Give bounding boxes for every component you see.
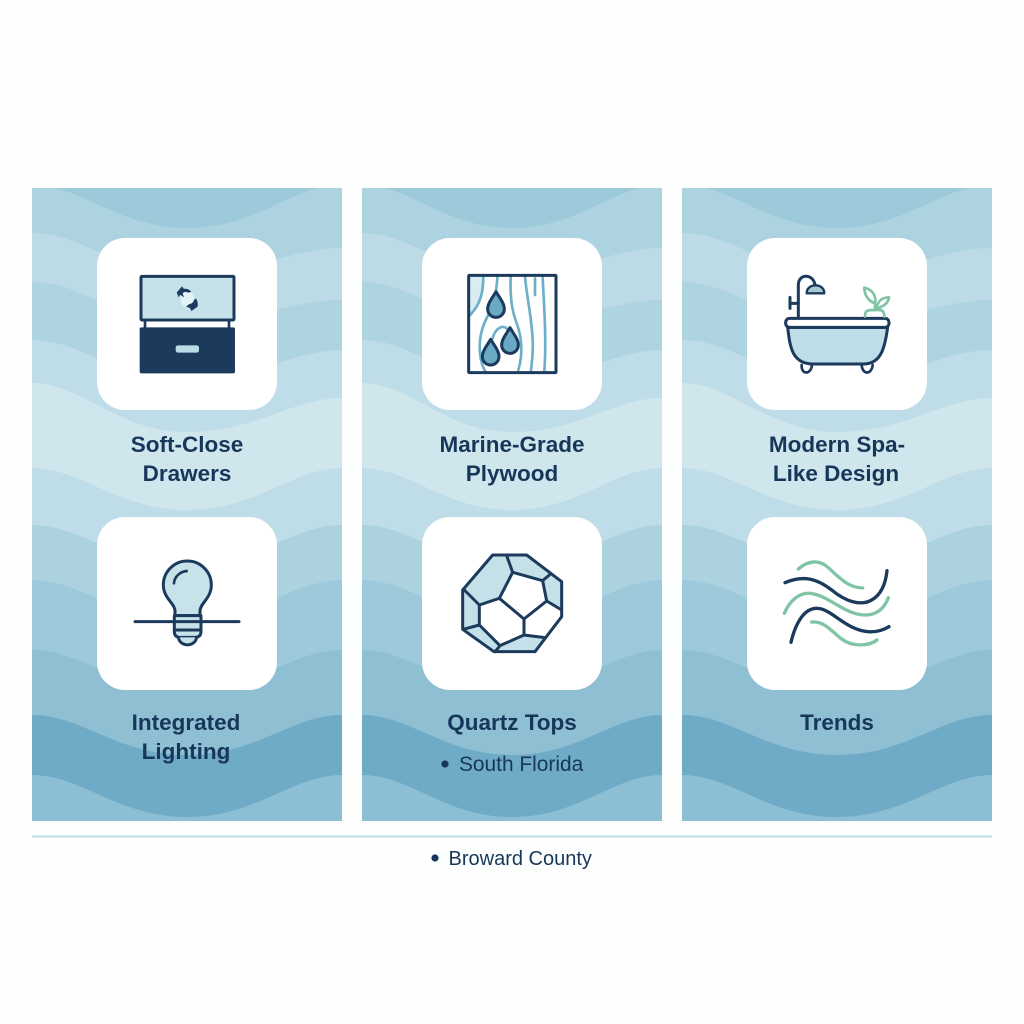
card: modern spa-like design <box>747 238 927 486</box>
panel: middle column <box>362 185 662 821</box>
label: soft-close drawers: Soft-Close <box>131 432 243 457</box>
icon: drawer with arrows <box>140 276 235 373</box>
label: marine-grade plywood: Marine-Grade <box>439 432 585 457</box>
wave background: left column <box>32 185 342 821</box>
wave background: middle column <box>362 185 662 821</box>
label: modern spa-like design: Modern Spa- <box>769 432 905 457</box>
panel: right column <box>682 185 992 821</box>
label: trends: Trends <box>800 710 874 735</box>
label: modern spa-like design: Like Design <box>773 461 899 486</box>
label: integrated lighting: Integrated <box>132 710 240 735</box>
panel: left column <box>32 185 342 821</box>
card: soft-close drawers <box>97 238 277 486</box>
label: quartz tops: Quartz Tops <box>447 710 577 735</box>
card: marine-grade plywood <box>422 238 602 486</box>
label: integrated lighting: Lighting <box>142 739 230 764</box>
card: quartz tops <box>422 517 602 735</box>
icon: faceted quartz <box>463 555 562 652</box>
icon: light bulb <box>135 561 239 645</box>
icon: plywood with water drops <box>469 275 556 373</box>
card: trends <box>747 517 927 735</box>
bullet: broward county: Broward County <box>448 848 592 870</box>
bullet: south florida: South Florida <box>459 753 584 776</box>
label: soft-close drawers: Drawers <box>143 461 231 486</box>
card: integrated lighting <box>97 517 277 764</box>
icon: bathtub with shower and plant <box>786 276 889 372</box>
icon: flowing trend lines <box>784 562 889 645</box>
label: marine-grade plywood: Plywood <box>466 461 558 486</box>
wave background: right column <box>682 185 992 821</box>
